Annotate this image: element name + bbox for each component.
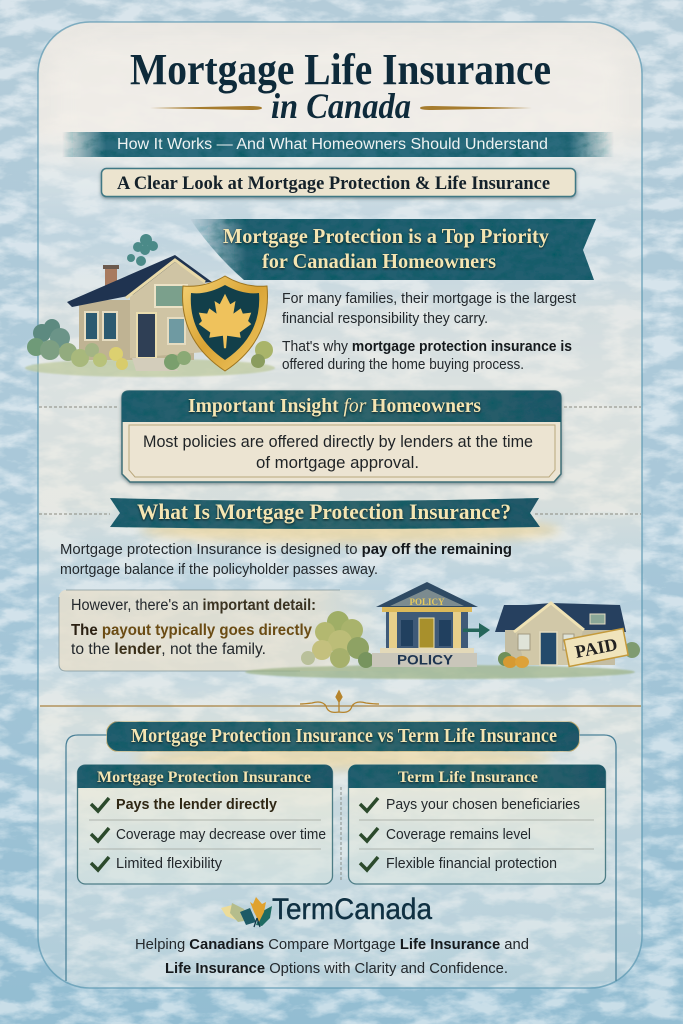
glow behind heading bbox=[140, 516, 560, 544]
logo leaves bbox=[221, 897, 272, 927]
bushes bbox=[27, 319, 273, 370]
callout heading: Important Insight for Homeowners bbox=[188, 395, 481, 417]
tree behind house bbox=[127, 234, 158, 266]
panel: term life insurance bbox=[348, 765, 606, 884]
paid sign: PAID bbox=[573, 634, 619, 662]
policy building: POLICY bbox=[409, 597, 445, 607]
banner second line: for Canadian Homeowners bbox=[262, 249, 496, 273]
panel: comparison frame bbox=[66, 735, 616, 981]
banner: top priority heading: Mortgage Protection is a Top Priority bbox=[223, 224, 549, 248]
check items bbox=[360, 798, 378, 870]
callout body: Most policies are offered directly by lenders at the time bbox=[143, 432, 533, 451]
paid house bbox=[495, 603, 640, 668]
list text bbox=[386, 797, 580, 872]
tagline pill: A Clear Look at Mortgage Protection & Life Insurance bbox=[117, 173, 550, 194]
arrow bbox=[463, 623, 490, 638]
illustration: bank to paid house bbox=[245, 582, 640, 679]
footer tagline: Helping Canadians Compare Mortgage Life Insurance and bbox=[135, 936, 529, 953]
list text: Pays the lender directly bbox=[116, 797, 277, 813]
subtitle ribbon bbox=[62, 132, 614, 157]
callout: important detail: However, there's an important detail: bbox=[71, 597, 316, 614]
list text: Coverage remains level bbox=[386, 827, 531, 843]
illustration: house with shield bbox=[25, 234, 275, 377]
title: Mortgage Life Insurance bbox=[130, 45, 551, 94]
footer tagline bbox=[135, 936, 529, 977]
list text: Limited flexibility bbox=[116, 856, 223, 872]
text block: mortgage responsibility: For many families, their mortgage is the largest bbox=[282, 291, 576, 307]
text block: mortgage responsibility bbox=[282, 291, 576, 373]
panel: mortgage protection insurance bbox=[78, 765, 332, 884]
callout: important insight: of mortgage approval. bbox=[256, 453, 419, 472]
bush bbox=[301, 611, 374, 668]
callout: important insight bbox=[122, 391, 561, 482]
text block: definition bbox=[60, 541, 512, 578]
list text: Coverage may decrease over time bbox=[116, 827, 326, 843]
panel: mortgage protection insurance: Mortgage Protection Insurance bbox=[97, 769, 311, 786]
heading: comparison: Mortgage Protection Insurance vs Term Life Insurance bbox=[131, 726, 557, 747]
logo: TermCanada: TermCanada bbox=[272, 893, 432, 926]
title second line: in Canada bbox=[271, 86, 411, 126]
logo: TermCanada bbox=[221, 893, 432, 927]
text block: definition: Mortgage protection Insurance is designed to pay off the remaining bbox=[60, 541, 512, 558]
text block: mortgage responsibility: financial responsibility they carry. bbox=[282, 311, 488, 327]
card header bbox=[348, 765, 606, 788]
callout: important detail: to the lender, not the family. bbox=[71, 641, 266, 658]
divider ornament bbox=[40, 691, 641, 712]
subtitle ribbon: How It Works — And What Homeowners Should Understand bbox=[117, 136, 548, 153]
policy building: POLICY bbox=[397, 652, 453, 668]
callout: important detail: The payout typically goes directly bbox=[71, 622, 312, 639]
callout: important detail bbox=[59, 590, 404, 671]
text block: mortgage responsibility: offered during the home buying process. bbox=[282, 357, 524, 373]
maple leaf bbox=[199, 294, 251, 348]
list text bbox=[116, 797, 326, 872]
ribbon: what is mortgage protection insurance: What Is Mortgage Protection Insurance? bbox=[137, 499, 511, 524]
shield bbox=[183, 276, 267, 371]
check items bbox=[91, 798, 109, 870]
panel: term life insurance: Term Life Insurance bbox=[398, 769, 538, 786]
banner: top priority heading bbox=[190, 219, 596, 280]
policy building bbox=[372, 582, 478, 668]
footer tagline: Life Insurance Options with Clarity and Confidence. bbox=[165, 960, 508, 977]
paid sign bbox=[564, 629, 628, 666]
list text: Flexible financial protection bbox=[386, 856, 557, 872]
title bbox=[130, 45, 551, 126]
text block: mortgage responsibility: That's why mortgage protection insurance is bbox=[282, 339, 572, 355]
house body bbox=[67, 255, 212, 371]
chimney bbox=[103, 265, 119, 288]
list text: Pays your chosen beneficiaries bbox=[386, 797, 580, 813]
card header bbox=[78, 765, 332, 788]
heading: comparison bbox=[106, 722, 580, 770]
text block: definition: mortgage balance if the policyholder passes away. bbox=[60, 561, 378, 578]
title gold flourishes bbox=[150, 106, 532, 110]
